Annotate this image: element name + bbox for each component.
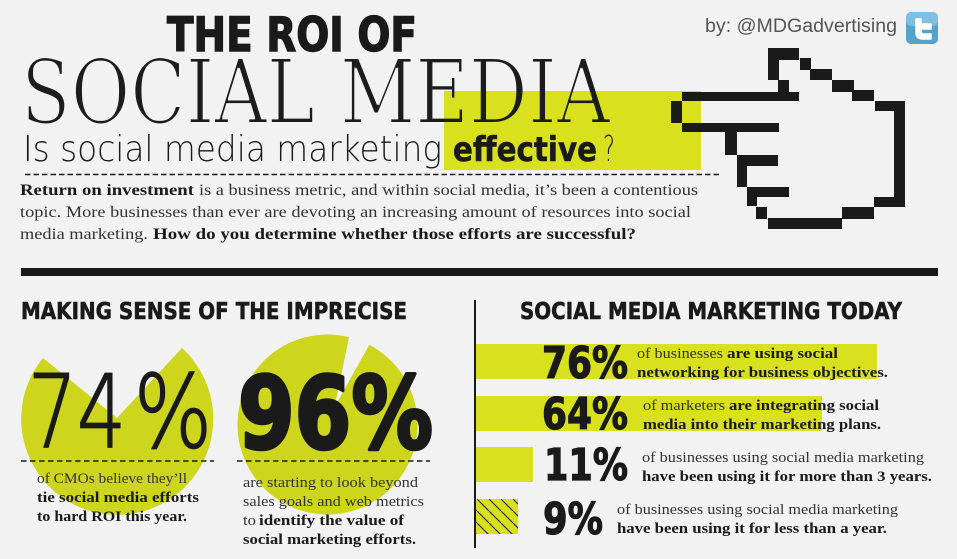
intro paragraph: How do you determine whether those efforts are successful? xyxy=(153,226,636,243)
heading: MAKING SENSE OF THE IMPRECISE xyxy=(21,297,407,325)
stat row: 9%: 9% xyxy=(543,494,603,545)
stat row: 76%: 76% xyxy=(542,338,628,389)
stat row: 64%: of marketers xyxy=(643,398,725,414)
stat: 96%: 96% xyxy=(238,355,433,472)
text: 96% caption xyxy=(243,475,424,548)
text: 96% caption: social marketing efforts. xyxy=(243,532,416,548)
intro paragraph: topic. More businesses than ever are devoting an increasing amount of resources into social xyxy=(20,204,691,221)
stat: 74%: 74 xyxy=(28,353,126,471)
stat row: 76%: are using social xyxy=(727,346,838,362)
stat row: 9%: of businesses using social media marketing xyxy=(617,502,898,518)
stat row: 64%: media into their marketing plans. xyxy=(643,417,881,433)
stat row: 11% xyxy=(544,440,932,491)
pie chart: 96 percent xyxy=(237,334,417,514)
stat row: 64%: 64% xyxy=(542,389,628,440)
icon: twitter xyxy=(906,12,938,44)
bar: 64% xyxy=(476,396,822,431)
text: 96% caption: sales goals and web metrics xyxy=(243,494,424,510)
title xyxy=(21,8,611,144)
stat: 74%: % xyxy=(134,353,212,471)
panel: making sense of the imprecise xyxy=(21,297,433,548)
stat row: 11%: have been using it for more than 3 years. xyxy=(642,469,932,485)
intro paragraph: Return on investment xyxy=(20,182,195,199)
title line: social media: SOCIAL xyxy=(21,40,315,144)
title line: the ROI of: THE ROI OF xyxy=(167,8,417,63)
text: 74% caption: to hard ROI this year. xyxy=(37,509,187,525)
title line: social media: MEDIA xyxy=(340,40,611,144)
text: 96% caption: are starting to look beyond xyxy=(243,475,419,491)
text: 74% caption: tie social media efforts xyxy=(37,490,199,506)
text: 96% caption: identify the value of xyxy=(259,513,404,529)
icon: pixel pointing hand xyxy=(671,48,905,229)
text: 74% caption xyxy=(37,471,199,525)
bar: 9% hatched xyxy=(476,499,518,534)
subtitle question: Is social media marketing xyxy=(23,129,442,170)
text: 96% caption: to xyxy=(243,513,256,529)
intro paragraph: is a business metric, and within social media, it’s been a contentious xyxy=(199,182,698,199)
byline: by: @MDGadvertising xyxy=(705,16,897,37)
stat row: 76%: networking for business objectives. xyxy=(637,365,888,381)
bar: 76% xyxy=(476,344,877,379)
stat row: 11%: of businesses using social media marketing xyxy=(642,450,924,466)
stat row: 76% xyxy=(542,338,888,389)
panel: social media marketing today xyxy=(476,297,932,545)
text: 74% caption: of CMOs believe they’ll xyxy=(37,471,187,487)
stat row: 11%: 11% xyxy=(544,440,628,491)
stat row: 64%: are integrating social xyxy=(729,398,879,414)
highlight block xyxy=(444,91,701,170)
subtitle question: effective xyxy=(453,130,597,170)
intro paragraph: media marketing. xyxy=(20,226,148,243)
intro paragraph xyxy=(20,182,698,243)
subtitle question: ? xyxy=(603,129,615,170)
stat row: 64% xyxy=(542,389,881,440)
stat row: 76%: of businesses xyxy=(637,346,723,362)
stat row: 9% xyxy=(543,494,898,545)
pie chart: 74 percent xyxy=(21,348,213,515)
bar: 11% xyxy=(476,447,533,482)
stat row: 9%: have been using it for less than a year. xyxy=(617,521,887,537)
